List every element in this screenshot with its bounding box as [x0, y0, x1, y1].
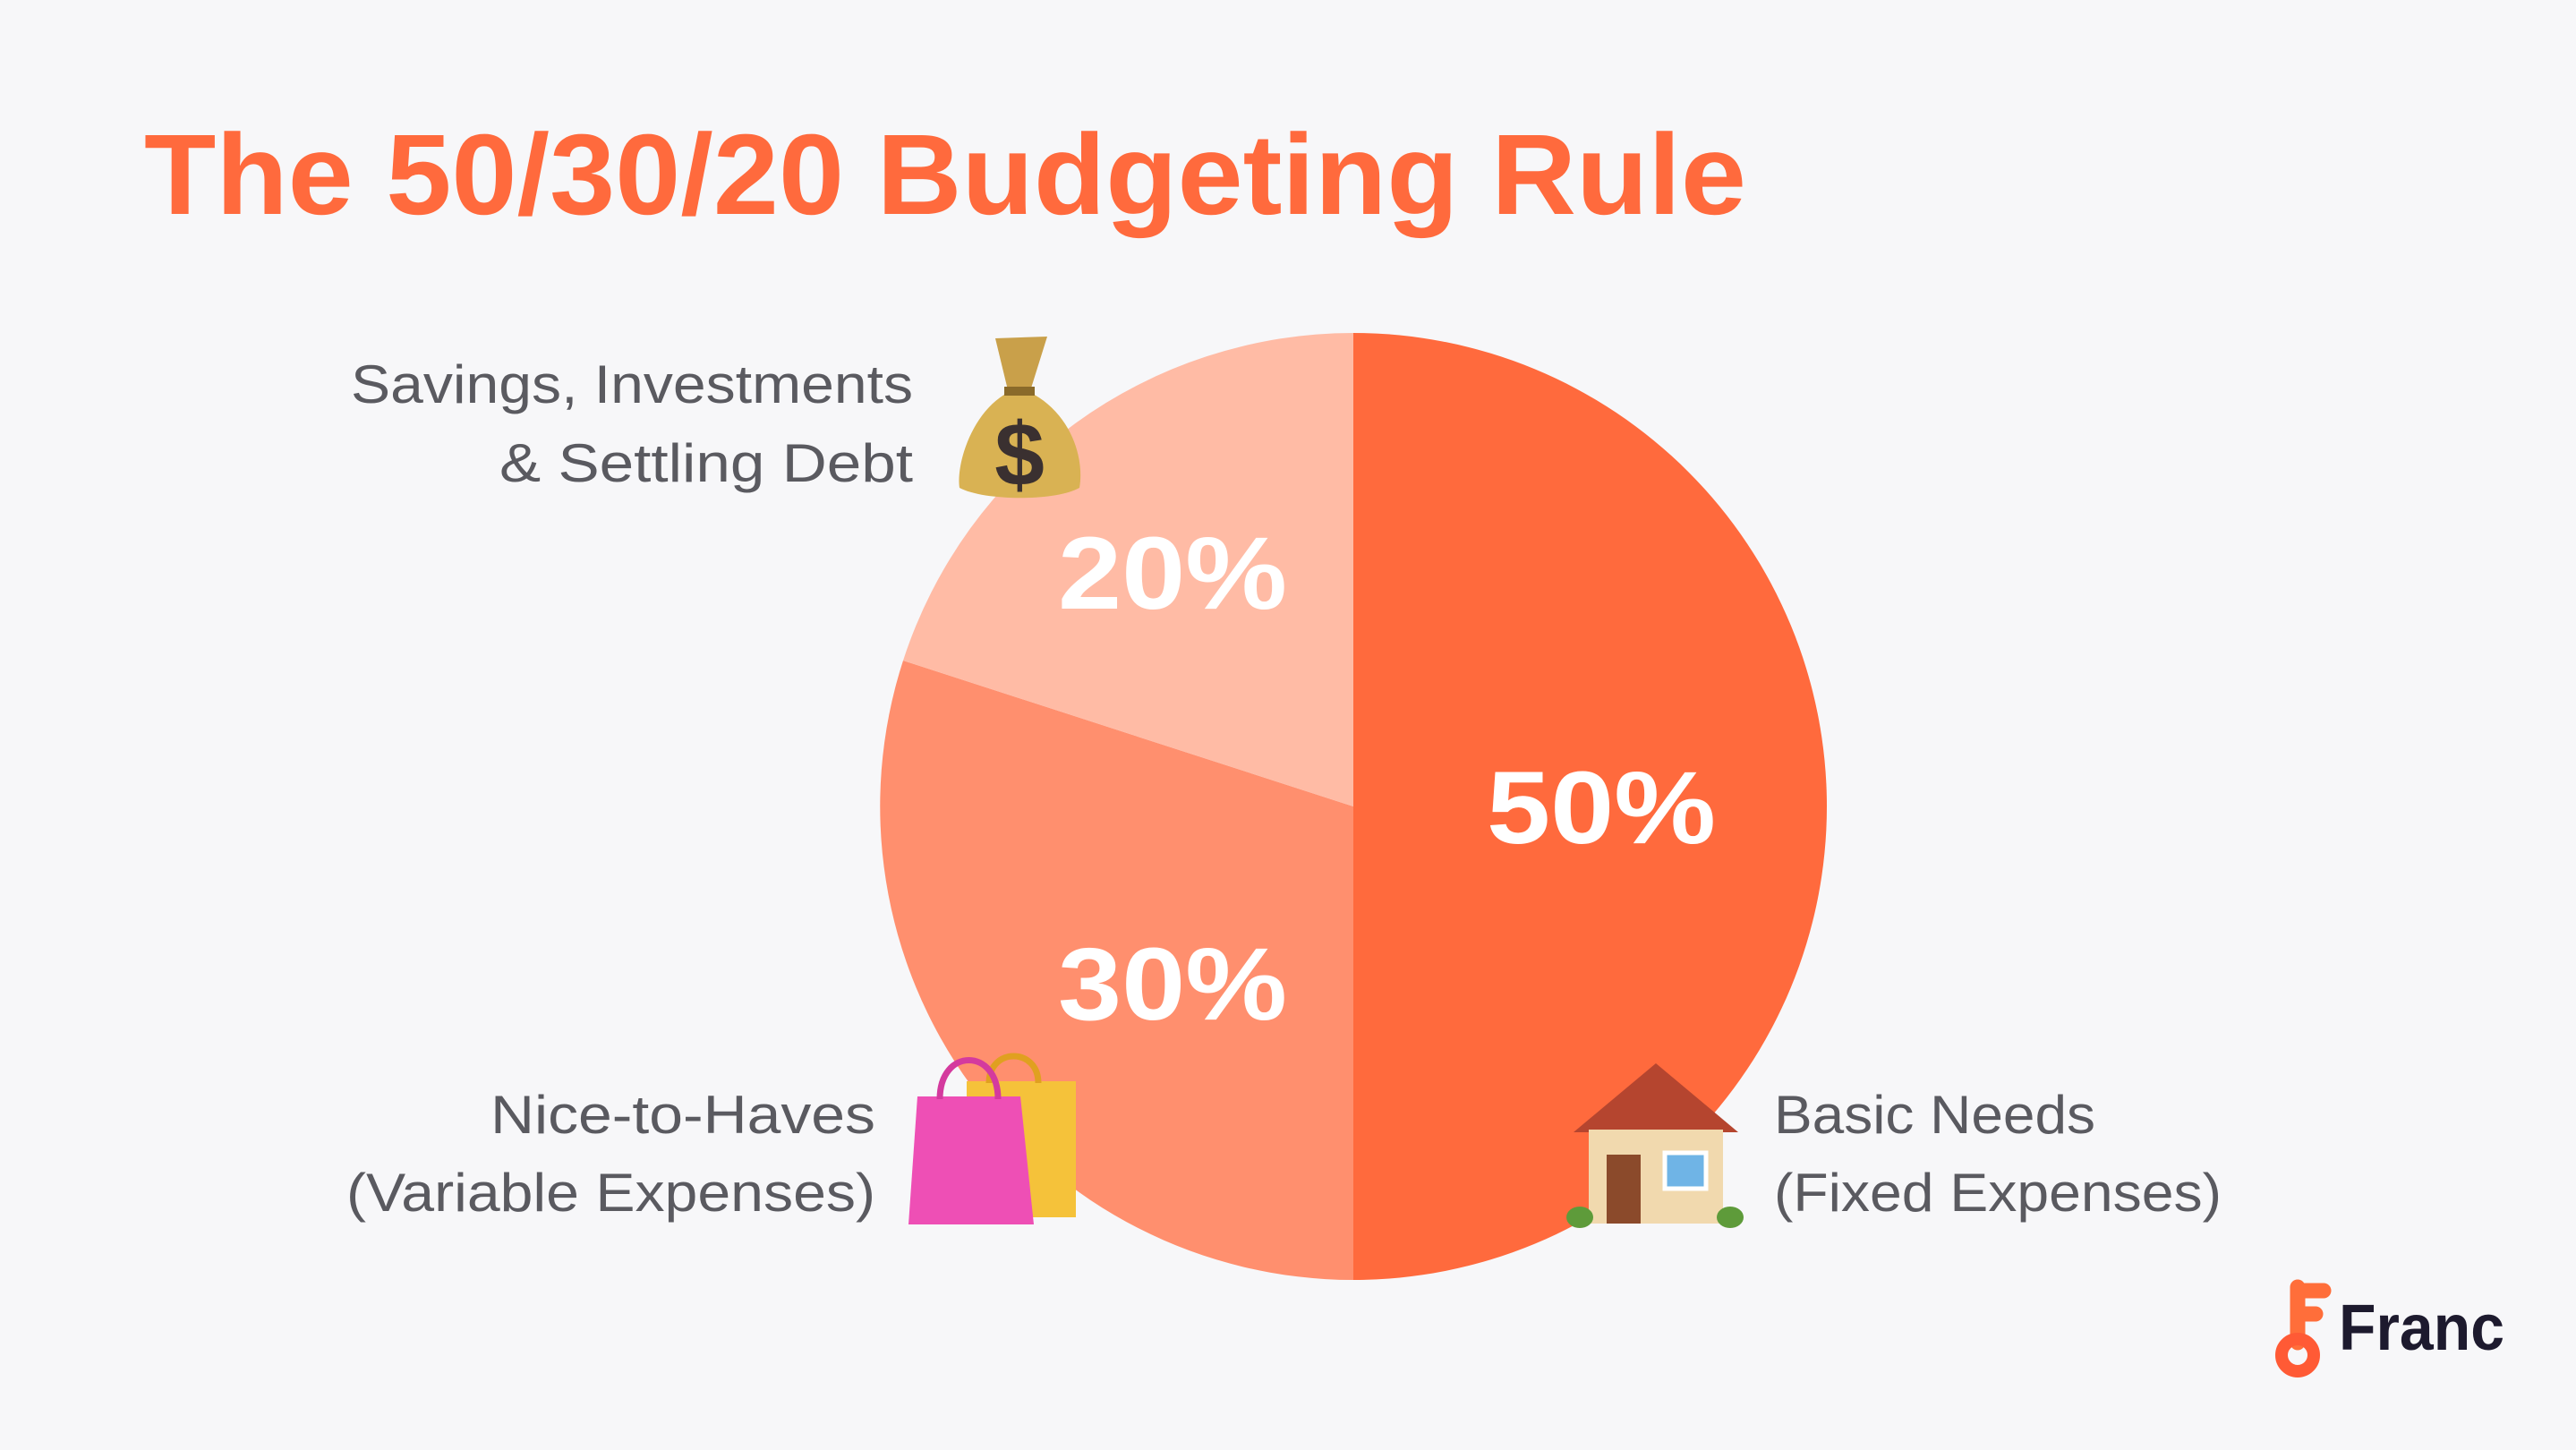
slice: 50% basic needs — [1353, 333, 1827, 1280]
label: 50%: 50% — [1487, 751, 1716, 866]
logo: Franc — [2282, 1287, 2504, 1371]
text: savings label — [351, 354, 913, 493]
text: basic needs label: Basic Needs — [1774, 1085, 2095, 1145]
text: basic needs label: (Fixed Expenses) — [1774, 1163, 2222, 1223]
slice: 30% nice-to-haves — [880, 661, 1353, 1280]
text: savings label: Savings, Investments — [351, 354, 913, 414]
icon: shopping bags — [908, 1056, 1076, 1224]
icon: house — [1566, 1063, 1744, 1228]
text: basic needs label — [1774, 1085, 2222, 1223]
label: 20%: 20% — [1058, 516, 1287, 631]
text: nice-to-haves label: Nice-to-Haves — [490, 1085, 875, 1145]
pie chart — [880, 333, 1827, 1280]
logo: Franc: Franc — [2339, 1292, 2504, 1364]
label: 30%: 30% — [1058, 927, 1287, 1042]
icon: money bag — [959, 337, 1080, 505]
slice: 20% savings — [903, 333, 1353, 806]
text: nice-to-haves label — [346, 1085, 875, 1223]
text: nice-to-haves label: (Variable Expenses) — [346, 1163, 875, 1223]
icon: money bag: $ — [994, 405, 1045, 505]
text: savings label: & Settling Debt — [499, 433, 913, 493]
title: The 50/30/20 Budgeting Rule — [144, 111, 1746, 239]
